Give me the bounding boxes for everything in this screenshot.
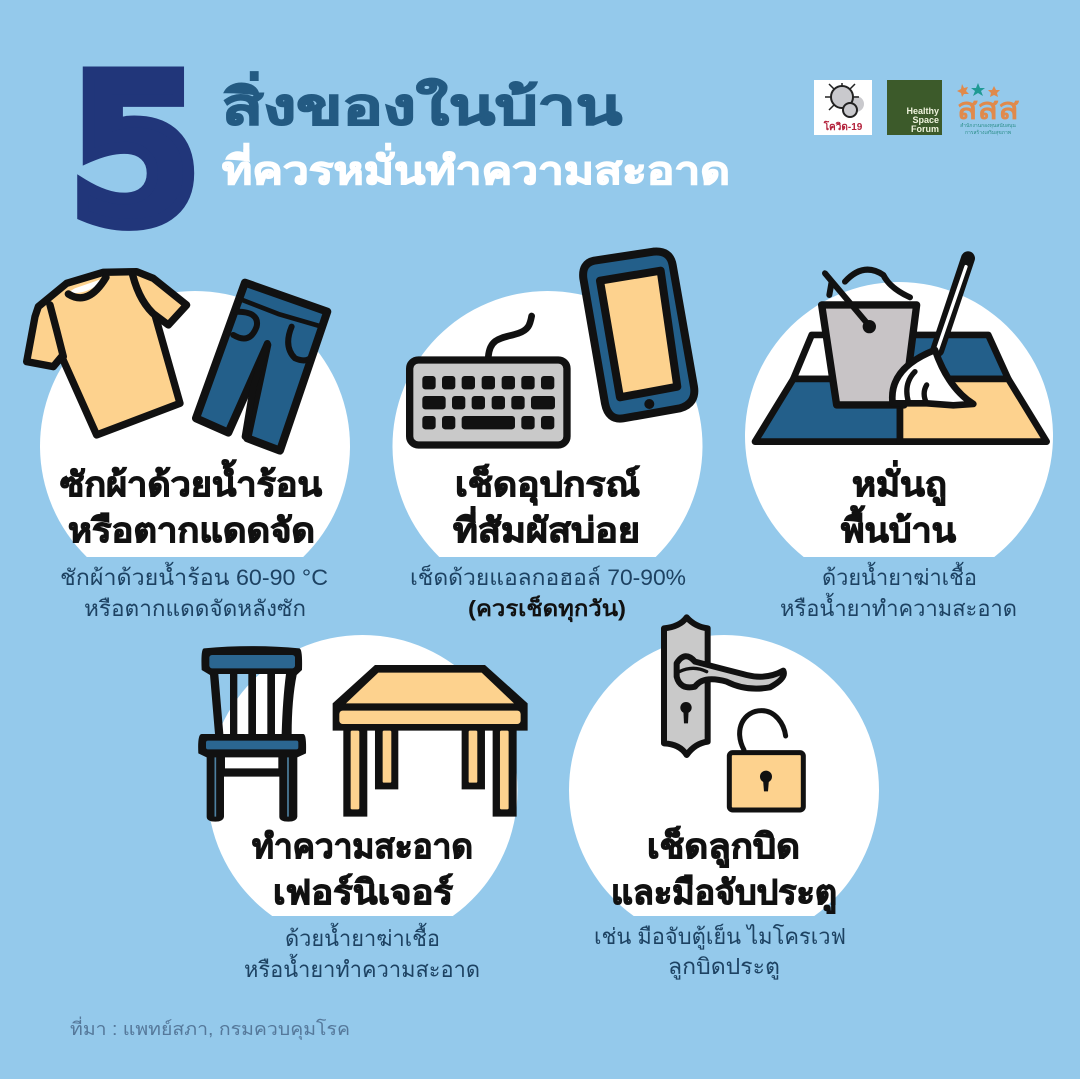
logo: Healthy Space Forum: Space [912,115,939,125]
icon: t-shirt [27,272,187,435]
description line 2: หรือน้ำยาทำความสะอาด [780,593,1017,621]
heading line 2: และมือจับประตู [611,874,837,914]
description bold: (ควรเช็ดทุกวัน) [468,594,626,623]
circle background [207,635,517,916]
panel: devices [392,251,702,623]
description line 2: หรือน้ำยาทำความสะอาด [244,954,480,982]
logo: ThaiHealth: สสส [957,93,1020,126]
description: เช็ดด้วยแอลกอฮอล์ 70-90% [410,563,686,590]
heading line 2: ที่สัมผัสบ่อย [453,506,640,550]
panel: laundry [27,272,350,621]
logo: covid: โควิด-19 [823,120,863,133]
heading: เช็ดลูกบิด [647,825,800,868]
icon: table [333,665,528,817]
panel: furniture [198,635,528,982]
description line 2: ลูกบิดประตู [668,954,780,980]
heading: เช็ดอุปกรณ์ [455,463,640,506]
heading: ทำความสะอาด [252,828,473,866]
description: เช่น มือจับตู้เย็น ไมโครเวฟ [594,922,846,950]
icon: jeans [196,283,327,451]
heading line 2: หรือตากแดดจัด [68,512,315,550]
big number 5: 5 [68,33,202,271]
logo: ThaiHealth: การสร้างเสริมสุขภาพ [965,129,1011,136]
logo: Healthy Space Forum: Forum [911,124,939,134]
circle background [40,291,350,557]
logo: covid [814,80,872,135]
title line 2: ที่ควรหมั่นทำความสะอาด [222,143,730,193]
logo: Healthy Space Forum: Healthy [906,106,939,116]
circle background [745,282,1053,557]
heading line 2: พื้นบ้าน [841,505,956,550]
icon: keyboard [410,316,567,445]
description: ด้วยน้ำยาฆ่าเชื้อ [822,562,977,590]
logo: Healthy Space Forum [887,80,942,135]
title line 1: สิ่งของในบ้าน [222,72,622,135]
circle background [392,291,702,557]
description line 2: หรือตากแดดจัดหลังซัก [84,596,306,621]
icon: mop [892,258,973,405]
icon: floor tiles [755,335,1047,442]
panel: floor [745,258,1053,621]
logo: ThaiHealth [957,83,1020,136]
icon: door handle [664,617,784,755]
logo: ThaiHealth: สำนักงานกองทุนสนับสนุน [960,123,1016,129]
heading: ซักผ้าด้วยน้ำร้อน [60,459,322,504]
heading line 2: เฟอร์นิเจอร์ [273,873,454,912]
description: ด้วยน้ำยาฆ่าเชื้อ [285,923,440,951]
description: ชักผ้าด้วยน้ำร้อน 60-90 °C [60,562,328,590]
icon: bucket [822,270,917,405]
icon: chair [198,646,306,822]
icon: smartphone [583,251,694,419]
icon: padlock [729,711,803,810]
circle background [569,635,879,916]
source credit: ที่มา : แพทย์สภา, กรมควบคุมโรค [70,1016,350,1040]
heading: หมั่นถู [852,460,947,506]
panel: door handles [569,617,879,980]
